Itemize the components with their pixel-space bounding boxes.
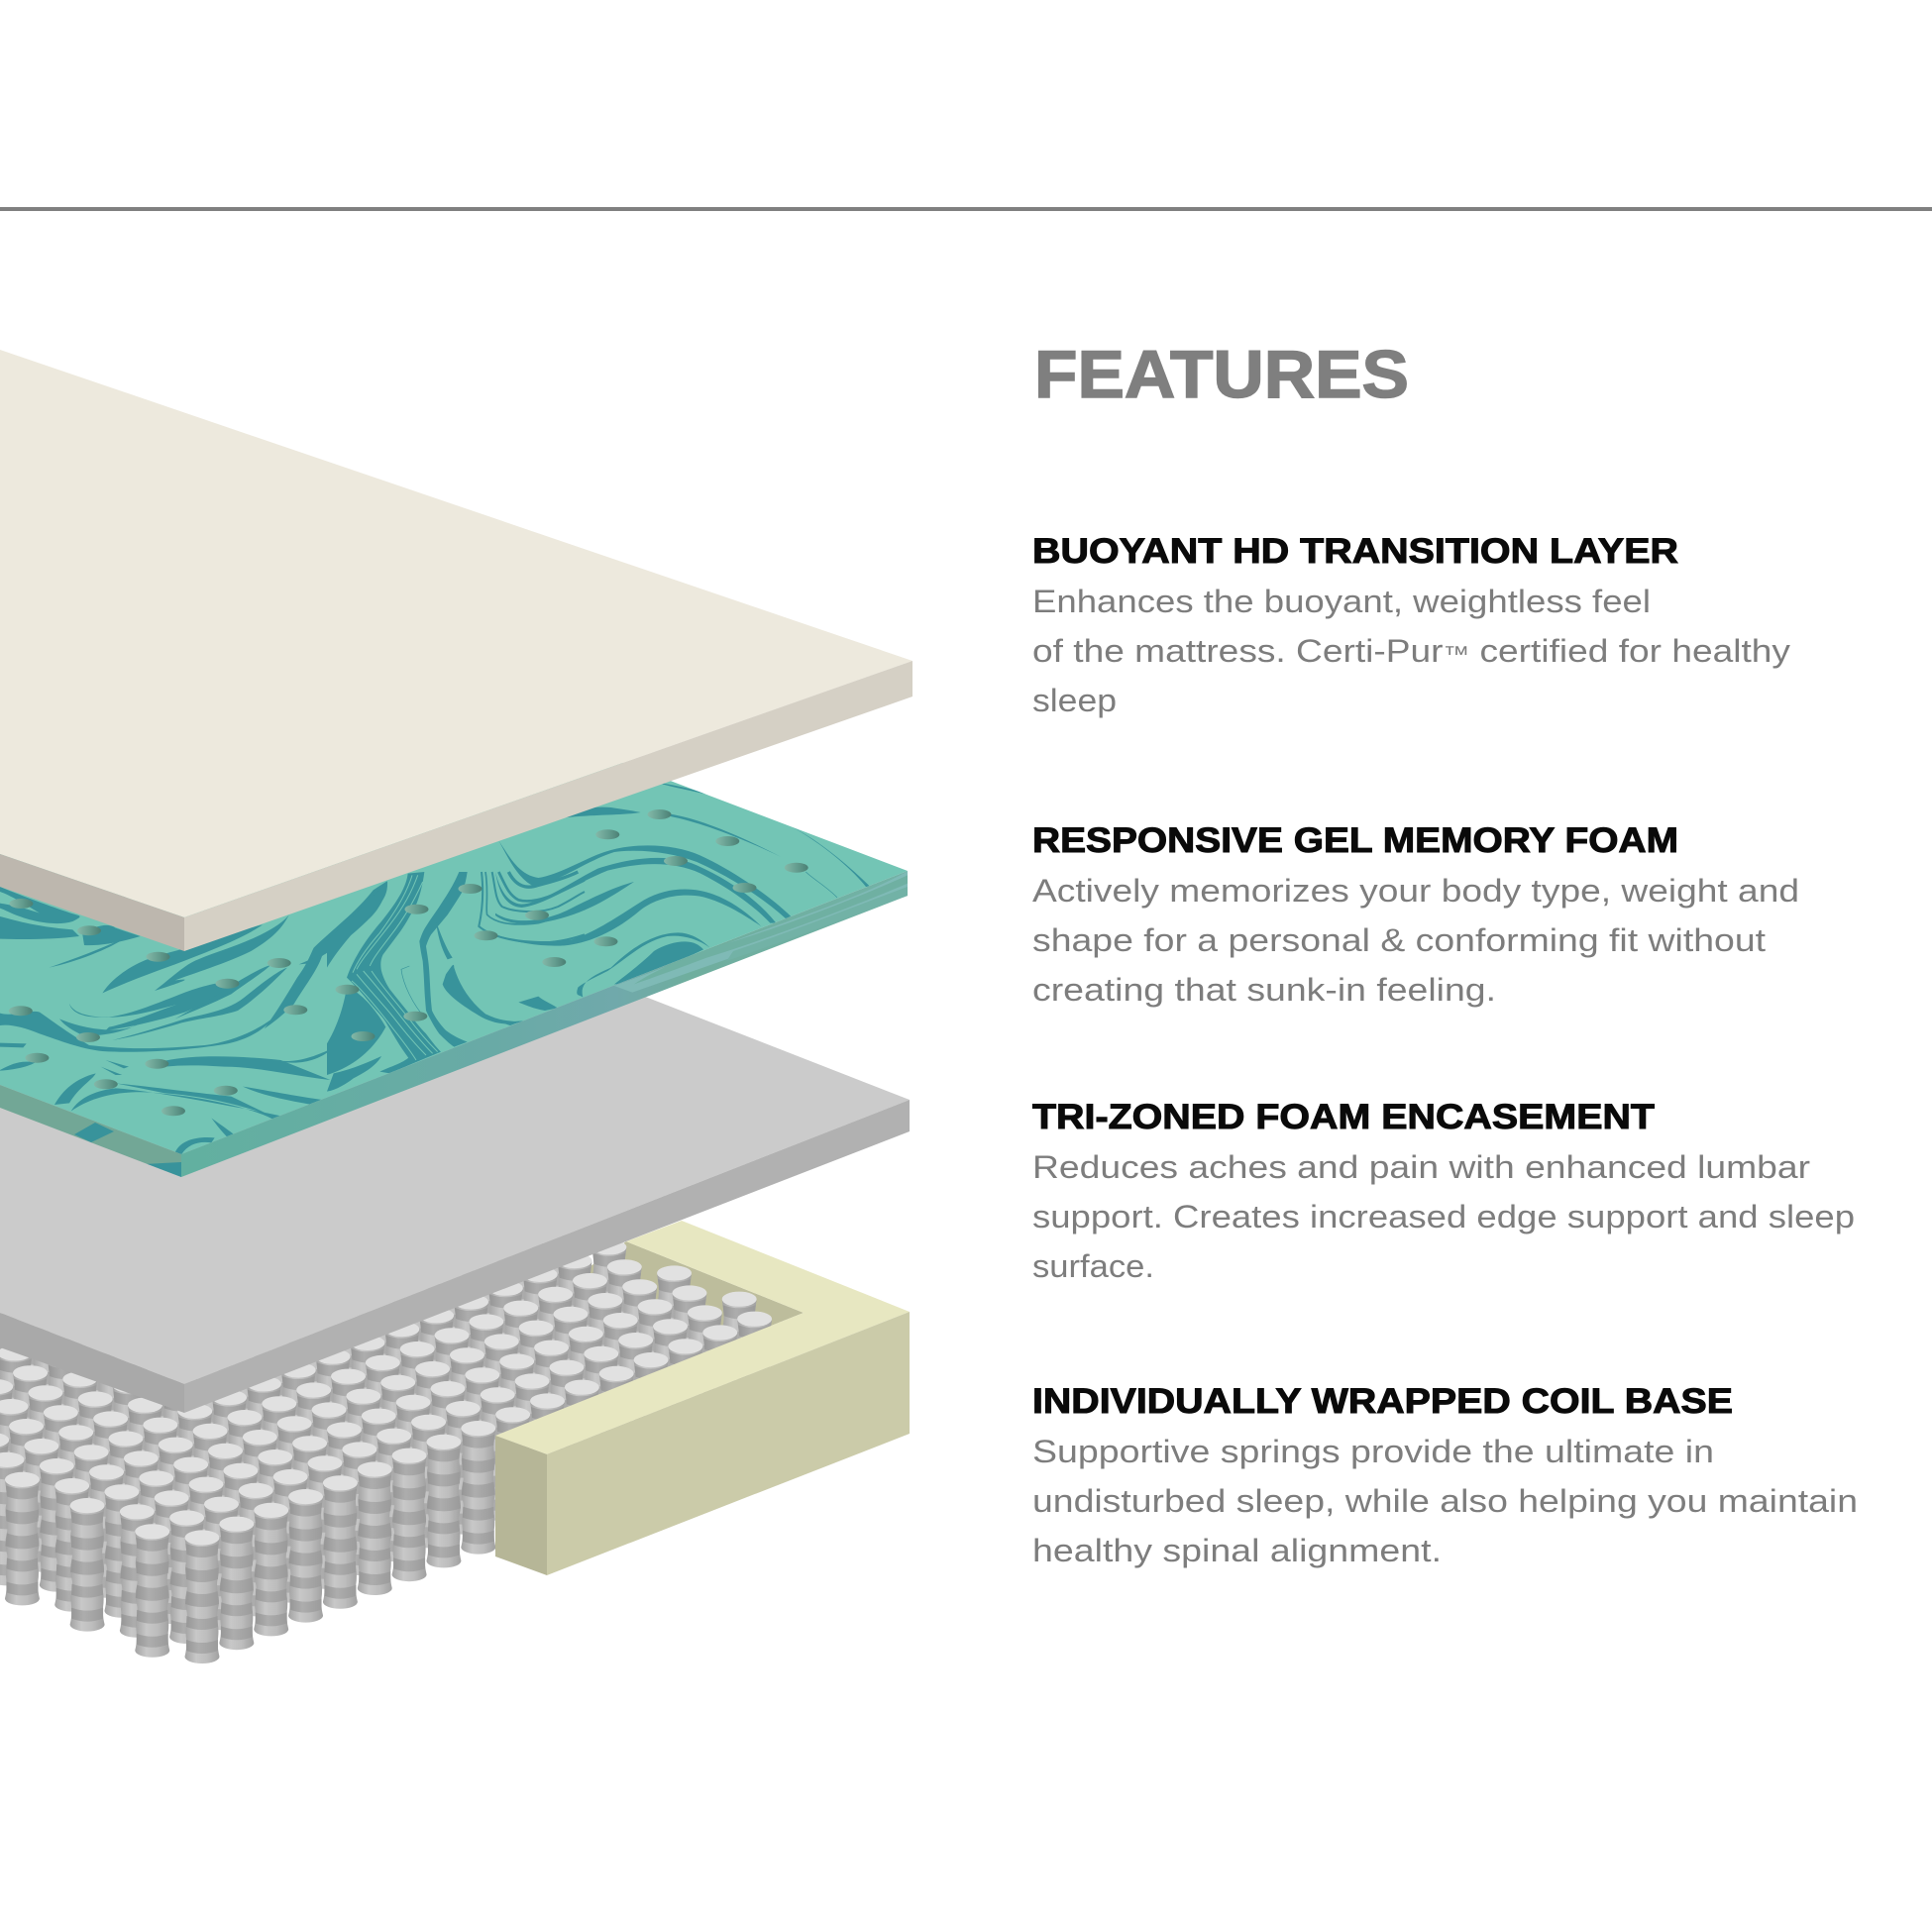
feature description: shape for a personal & conforming fit without (1032, 922, 1766, 958)
feature description: surface. (1032, 1248, 1154, 1284)
foam base right face (547, 1312, 910, 1575)
feature heading: RESPONSIVE GEL MEMORY FOAM (1032, 820, 1678, 860)
gel foam right side face (181, 871, 908, 1177)
feature description: creating that sunk-in feeling. (1032, 972, 1496, 1008)
gel foam top surface (0, 526, 908, 1154)
layer: buoyant HD transition layer (0, 350, 912, 951)
feature description: sleep (1032, 683, 1117, 718)
gel foam marble swirls (0, 783, 870, 1154)
feature: tri-zoned foam encasement (1032, 1097, 1855, 1284)
foam base left face (495, 1436, 547, 1575)
feature description: healthy spinal alignment. (1032, 1533, 1442, 1568)
feature heading: TRI-ZONED FOAM ENCASEMENT (1032, 1097, 1655, 1136)
feature heading: INDIVIDUALLY WRAPPED COIL BASE (1032, 1381, 1733, 1421)
feature description: Supportive springs provide the ultimate in (1032, 1434, 1714, 1469)
feature heading: BUOYANT HD TRANSITION LAYER (1032, 531, 1678, 571)
feature description: undisturbed sleep, while also helping you maintain (1032, 1483, 1858, 1519)
gel foam perforation holes (9, 809, 808, 1116)
gel foam left side face (0, 1085, 181, 1179)
layer: coil base (0, 1135, 910, 1664)
feature description: support. Creates increased edge support and sleep (1032, 1199, 1855, 1234)
feature description (1032, 584, 1790, 718)
feature description: of the mattress. Certi-Pur ™ certified for healthy (1032, 633, 1790, 669)
top divider line (0, 207, 1932, 211)
feature: individually wrapped coil base (1032, 1381, 1858, 1568)
foam base top surface (495, 1221, 910, 1454)
pocket coils (0, 1135, 772, 1664)
feature description (1032, 873, 1799, 1008)
layer: gel memory foam (0, 763, 908, 1177)
feature description (1032, 1149, 1855, 1284)
feature description: Actively memorizes your body type, weight and (1032, 873, 1799, 909)
feature description: Enhances the buoyant, weightless feel (1032, 584, 1651, 619)
inner wall of foam base (416, 1241, 804, 1436)
heading: features: FEATURES (1034, 337, 1409, 412)
gel foam corner sheen (614, 871, 908, 993)
feature: responsive gel memory foam (1032, 820, 1799, 1008)
layer: tri-zoned foam encasement (0, 745, 910, 1413)
feature description: Reduces aches and pain with enhanced lumbar (1032, 1149, 1810, 1185)
feature: buoyant HD transition layer (1032, 531, 1790, 718)
feature description (1032, 1434, 1858, 1568)
